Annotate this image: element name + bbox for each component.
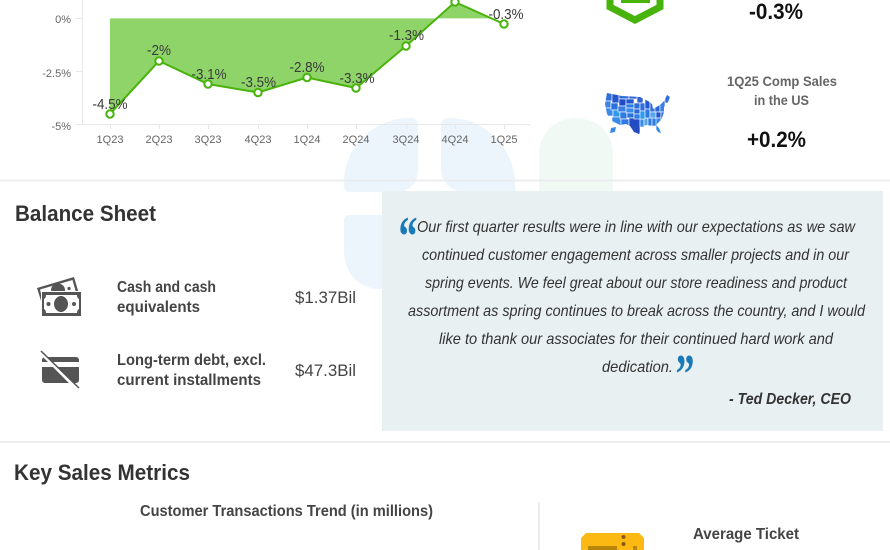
heading: Key Sales Metrics: Key Sales Metrics bbox=[14, 460, 190, 485]
metric label: average ticket: Average Ticket bbox=[693, 526, 800, 543]
label: Long-term debt, excl. bbox=[117, 352, 266, 369]
value: $47.3Bil bbox=[295, 361, 356, 380]
y axis labels: -5% bbox=[51, 121, 71, 133]
stat: US comp sales: +0.2% bbox=[747, 127, 806, 152]
row: long-term debt bbox=[41, 351, 356, 391]
x axis labels: 1Q25 bbox=[491, 134, 517, 146]
data labels bbox=[92, 6, 524, 113]
quote text bbox=[408, 219, 866, 376]
label bbox=[117, 279, 216, 316]
icon: opening quotation mark: “ bbox=[398, 206, 418, 268]
icon: yellow ticket bbox=[581, 533, 644, 550]
data labels: -2% bbox=[147, 42, 171, 59]
value: $1.37Bil bbox=[295, 288, 356, 307]
x axis labels: 1Q23 bbox=[97, 134, 123, 146]
text: comp sales in the US label: in the US bbox=[754, 92, 809, 108]
icon: US map bbox=[604, 92, 670, 135]
green trend line with markers bbox=[106, 0, 508, 118]
label: equivalents bbox=[117, 299, 200, 316]
quote text: spring events. We feel great about our store readiness and product bbox=[425, 275, 847, 292]
text: comp sales in the US label: 1Q25 Comp Sales bbox=[727, 73, 837, 89]
x axis labels bbox=[97, 134, 517, 146]
panel: CEO quote bbox=[382, 191, 883, 431]
data labels: -4.5% bbox=[92, 96, 128, 113]
data labels: -3.1% bbox=[192, 66, 226, 83]
icon: closing quotation mark: ” bbox=[676, 344, 694, 406]
quote text: like to thank our associates for their continued hard work and bbox=[439, 331, 834, 348]
quote text: Our first quarter results were in line with our expectations as we saw bbox=[417, 219, 856, 236]
x axis labels: 2Q23 bbox=[146, 134, 172, 146]
label: Cash and cash bbox=[117, 279, 216, 296]
data labels: -2.8% bbox=[290, 59, 324, 76]
heading: Balance Sheet: Balance Sheet bbox=[15, 201, 157, 226]
section dividers bbox=[0, 180, 890, 443]
label bbox=[117, 352, 266, 389]
icon: banknotes bbox=[37, 277, 82, 317]
icon: green store badge bbox=[610, 0, 660, 20]
data labels: -3.3% bbox=[340, 70, 374, 87]
y axis labels bbox=[42, 14, 71, 133]
x axis labels: 3Q23 bbox=[195, 134, 221, 146]
chart title: customer transactions trend: Customer Transactions Trend (in millions) bbox=[140, 503, 433, 520]
quote text: dedication. bbox=[602, 359, 673, 376]
x axis labels: 2Q24 bbox=[343, 134, 369, 146]
row: cash and cash equivalents bbox=[37, 277, 356, 317]
data labels: -3.5% bbox=[241, 74, 276, 91]
label: current installments bbox=[117, 372, 261, 389]
vertical divider bbox=[538, 502, 540, 550]
quote attribution: - Ted Decker, CEO bbox=[729, 391, 851, 408]
data labels: -1.3% bbox=[389, 27, 424, 44]
green area fill bbox=[110, 2, 492, 114]
icon: crossed-out credit card bbox=[41, 351, 79, 391]
x axis labels: 1Q24 bbox=[294, 134, 320, 146]
x axis labels: 3Q24 bbox=[393, 134, 419, 146]
line and area chart: comp sales trend bbox=[42, 0, 530, 146]
background logo watermark bbox=[344, 118, 613, 289]
y axis labels: 0% bbox=[55, 14, 71, 26]
text: comp sales in the US label bbox=[727, 73, 837, 108]
y axis labels: -2.5% bbox=[42, 68, 71, 80]
chart axes bbox=[76, 0, 530, 129]
x axis labels: 4Q23 bbox=[245, 134, 271, 146]
data labels: -0.3% bbox=[488, 6, 524, 23]
x axis labels: 4Q24 bbox=[442, 134, 468, 146]
quote text: continued customer engagement across smaller projects and in our bbox=[422, 247, 850, 264]
